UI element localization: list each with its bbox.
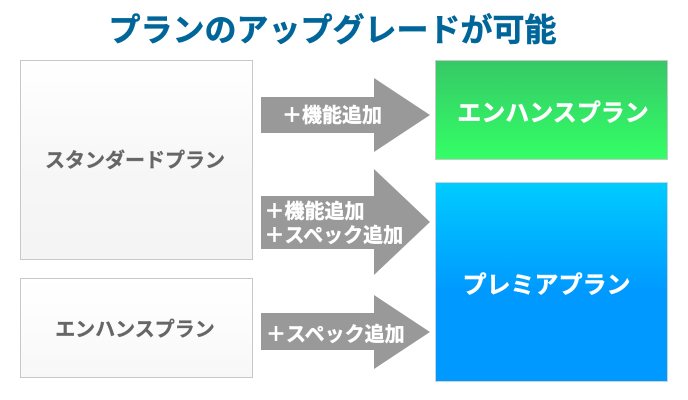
arrow: add features and specs: ＋機能追加 <box>264 200 364 223</box>
panel: enhanced plan source: エンハンスプラン <box>55 318 215 341</box>
arrow: add features and specs: ＋スペック追加 <box>264 224 403 247</box>
panel: standard plan: スタンダードプラン <box>45 148 225 172</box>
arrow: add specs: ＋スペック追加 <box>266 323 405 346</box>
panel: enhanced plan target: エンハンスプラン <box>457 100 649 127</box>
arrow: add specs <box>261 295 430 369</box>
panel: standard plan <box>20 60 252 260</box>
arrow: add features and specs <box>261 169 430 275</box>
panel: enhanced plan target <box>436 60 668 160</box>
title: プランのアップグレードが可能 <box>108 12 557 48</box>
panel: premium plan: プレミアプラン <box>462 272 630 299</box>
panel: premium plan <box>436 182 668 382</box>
panel: enhanced plan source <box>20 278 252 378</box>
arrow: add features <box>261 78 430 152</box>
arrow: add features: ＋機能追加 <box>282 104 382 127</box>
